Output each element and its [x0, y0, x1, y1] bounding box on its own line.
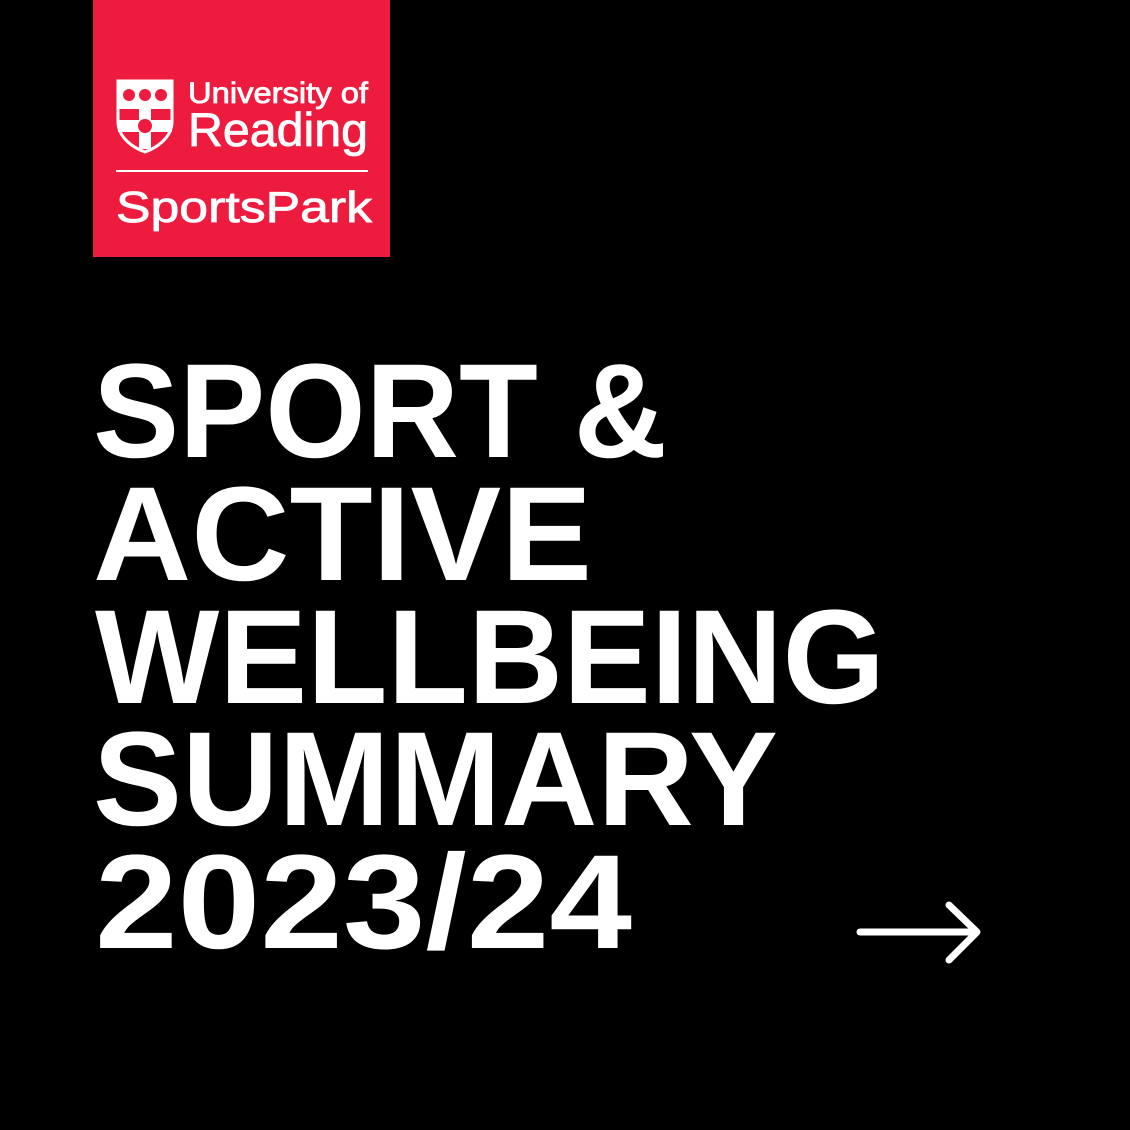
logo: wordmark: University of: [188, 77, 369, 110]
logo: wordmark: [116, 77, 373, 232]
logo: wordmark: SportsPark: [116, 183, 373, 232]
logo: crest: [116, 80, 174, 154]
logo panel: [93, 0, 390, 257]
title: ACTIVE: [93, 460, 592, 609]
title: SUMMARY: [93, 705, 778, 854]
arrow: [856, 902, 980, 964]
logo: wordmark: Reading: [188, 103, 368, 156]
title: SPORT &: [93, 337, 667, 486]
title: 2023/24: [95, 828, 632, 977]
title: WELLBEING: [95, 583, 885, 732]
